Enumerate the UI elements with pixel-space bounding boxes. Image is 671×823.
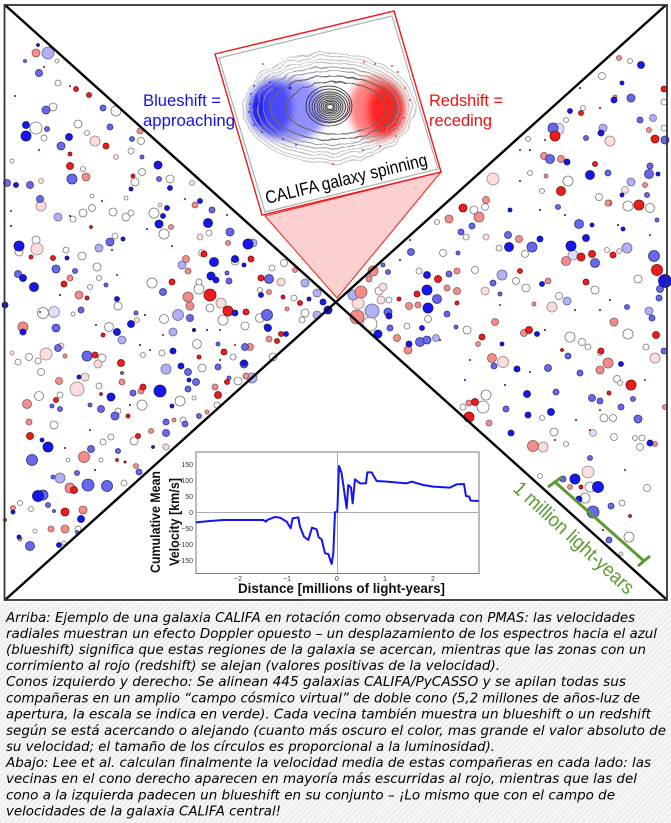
galaxy edge dots: [248, 61, 411, 165]
pink projection cone: [265, 172, 441, 298]
velocity curve: [196, 466, 479, 564]
caption text: radiales muestran un efecto Doppler opuesto – un desplazamiento de los espectros hacia el azul: [6, 627, 657, 642]
x axis tick labels: 0: [335, 576, 339, 583]
caption text: compañeras en un amplio “campo cósmico virtual” de doble cono (5,2 millones de años-luz de: [6, 692, 640, 706]
x axis title: Distance [millions of light-years]: [238, 580, 445, 596]
caption text: velocidades de la galaxia CALIFA central!: [6, 804, 281, 820]
y axis tick labels: −150: [177, 558, 193, 565]
caption text: vecinas en el cono derecho aparecen en mayoría más escurridas al rojo, mientras que las del: [6, 772, 637, 787]
caption text: apertura, la escala se indica en verde). Cada vecina también muestra un blueshift o un redshift: [6, 708, 652, 722]
panel: CALIFA galaxy velocity map: [215, 11, 441, 215]
label: blueshift: approaching: [143, 111, 235, 130]
y axis tick labels: 0: [189, 510, 193, 517]
caption text: cono a la izquierda padecen un blueshift en su conjunto – ¡Lo mismo que con el campo de: [6, 788, 615, 804]
label: blueshift: Blueshift =: [143, 91, 221, 110]
x axis tick labels: [234, 576, 435, 583]
y axis tick labels: 50: [185, 494, 193, 501]
y axis title: Cumulative Mean: [148, 471, 163, 573]
y axis tick labels: [177, 462, 193, 565]
label: redshift: receding: [429, 111, 492, 130]
caption text: Arriba: Ejemplo de una galaxia CALIFA en rotación como observada con PMAS: las velocidades: [5, 611, 635, 626]
caption text: su velocidad; el tamaño de los círculos es proporcional a la luminosidad).: [6, 740, 495, 755]
caption text: Abajo: Lee et al. calculan finalmente la velocidad media de estas compañeras en cada lado: las: [5, 756, 651, 771]
panel: right cone of companion galaxies: [348, 56, 671, 556]
panel: left cone of companion galaxies: [2, 44, 332, 550]
y axis title: Velocity [km/s]: [167, 478, 182, 566]
x axis tick labels: −1: [283, 576, 291, 583]
x axis tick labels: −2: [234, 576, 242, 583]
y axis tick labels: −100: [177, 542, 193, 549]
label: redshift: Redshift =: [429, 91, 503, 110]
y axis tick labels: −50: [181, 526, 193, 533]
y axis title: [148, 471, 182, 573]
caption inside galaxy panel: CALIFA galaxy spinning: [263, 150, 429, 208]
galaxy blue and red velocity field: [251, 76, 404, 141]
caption text: Conos izquierdo y derecho: Se alinean 445 galaxias CALIFA/PyCASSO y se apilan todas sus: [6, 675, 626, 690]
cone boundary lines: [5, 5, 666, 600]
caption text: [5, 611, 666, 820]
caption text: según se está acercando o alejando (cuanto más oscuro el color, mas grande el valor absoluto de: [6, 724, 666, 739]
caption text: (blueshift) significa que estas regiones de la galaxia se acercan, mientras que las zonas con un: [6, 643, 646, 658]
scale bar: 1 million light-years: 1 million light-years: [509, 477, 639, 599]
y axis tick labels: 150: [181, 462, 193, 469]
caption text: corrimiento al rojo (redshift) se alejan (valores positivas de la velocidad).: [6, 659, 500, 674]
x axis tick labels: 2: [431, 576, 435, 583]
x axis tick labels: 1: [383, 576, 387, 583]
galaxy contours: [243, 53, 415, 163]
outer frame: [4, 5, 667, 600]
galaxy centre highlight: [328, 105, 332, 109]
y axis tick labels: 100: [181, 478, 193, 485]
chart: cumulative mean velocity: [148, 452, 479, 596]
